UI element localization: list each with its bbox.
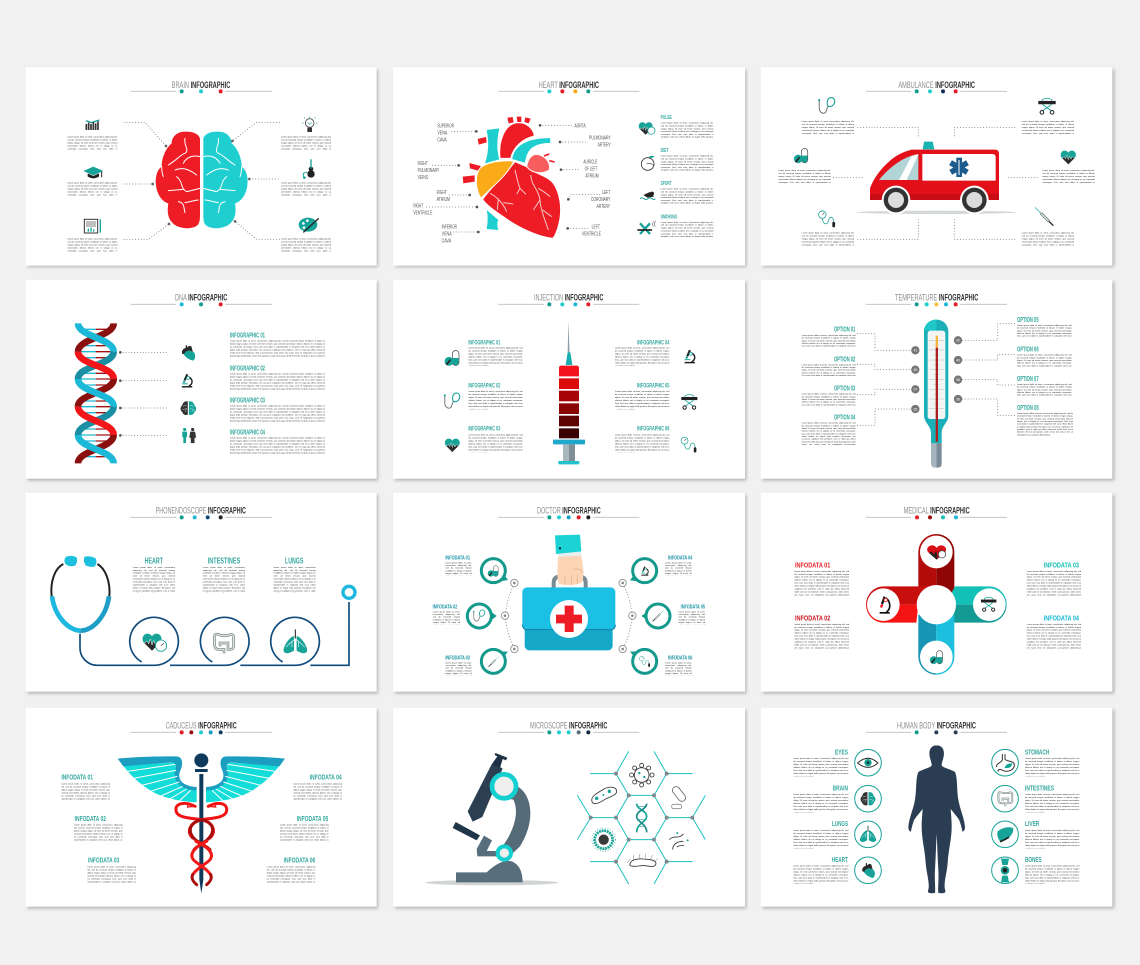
temperature markers: 42: [956, 339, 960, 343]
heart anatomy labels: RIGHT: [413, 203, 424, 209]
icon: stretcher: [981, 597, 996, 611]
syringe illustration: [553, 321, 585, 464]
infographic 01: INFOGRAPHIC 01: [468, 340, 501, 346]
heart anatomy labels: INFERIOR: [442, 224, 457, 230]
heading and text: pulse: PULSE: [661, 115, 672, 121]
heart anatomy labels: SUPERIOR: [437, 124, 454, 130]
option 07: OPTION 07: [1017, 376, 1039, 383]
infodata 04: [665, 555, 693, 576]
icon: apple: [641, 156, 654, 170]
infographic 02: INFOGRAPHIC 02: [230, 366, 265, 373]
infographic 04: INFOGRAPHIC 04: [230, 430, 265, 437]
dotted connectors: [857, 324, 1016, 425]
panel: ambulance infographic: [760, 68, 1116, 268]
infodata 04: INFODATA 04: [668, 555, 693, 561]
brain section: BRAIN: [833, 783, 848, 792]
icon: heart with gauge: [927, 545, 946, 560]
icon: pill: [794, 148, 808, 163]
option 05: [1017, 317, 1072, 338]
heart anatomy labels: PULMONARY: [589, 135, 611, 141]
title: TEMPERATURE INFOGRAPHIC: [895, 293, 979, 303]
panel: doctor infographic: [393, 492, 748, 696]
infodata 05: [678, 604, 705, 625]
infodata 06: INFODATA 06: [668, 655, 692, 661]
icon: stretcher: [681, 394, 697, 409]
infographic 06: INFOGRAPHIC 06: [637, 427, 670, 433]
infodata 03: INFODATA 03: [88, 857, 119, 864]
title: [866, 293, 1007, 306]
heart anatomy labels: CAVA: [437, 138, 447, 144]
icon: lungs: [284, 629, 307, 653]
title: HEART INFOGRAPHIC: [539, 80, 599, 90]
title: [498, 721, 639, 734]
title: HUMAN BODY INFOGRAPHIC: [897, 721, 976, 731]
icon: brain: [181, 401, 196, 415]
dotted connectors: [833, 128, 1038, 239]
heading and text: diet: DIET: [661, 148, 669, 154]
icon: bacterium left: [592, 787, 617, 804]
infographic 02: INFOGRAPHIC 02: [468, 383, 501, 389]
heart anatomy labels: VENTRICLE: [413, 210, 432, 216]
infographic 01: [230, 333, 325, 358]
heart anatomy labels: CAVA: [442, 238, 451, 244]
heart anatomy labels: OF LEFT: [585, 166, 598, 172]
infodata 04: INFODATA 04: [1044, 613, 1080, 622]
infodata 02: INFODATA 02: [795, 613, 830, 622]
infodata 05: [280, 816, 329, 842]
infodata 05: INFODATA 05: [297, 816, 328, 823]
infodata 01: [445, 555, 472, 576]
heart anatomy labels: VENTRICLE: [582, 231, 601, 237]
icon: teal virus: [592, 828, 615, 851]
icon: lungs: [860, 826, 876, 842]
heading and text: smoking: SMOKING: [661, 214, 678, 220]
infographic 04: INFOGRAPHIC 04: [637, 340, 670, 346]
infodata 04: INFODATA 04: [310, 775, 342, 782]
infodata 04: [293, 775, 342, 800]
icon: pill: [445, 350, 459, 366]
heart anatomy labels: VENA: [442, 231, 452, 237]
title: [498, 293, 639, 306]
heading and text: sport: SPORT: [661, 181, 672, 187]
icon: worm: [627, 854, 658, 866]
temperature markers: [911, 336, 962, 413]
icon: syringe: [1035, 207, 1053, 226]
icon: liver: [997, 827, 1013, 842]
icon: heart organ: [862, 863, 875, 878]
panel: phonendoscope infographic: [26, 492, 380, 696]
icon: swimmer: [640, 192, 655, 200]
infodata 03: INFODATA 03: [1044, 560, 1079, 569]
icon: stethoscope: [444, 393, 460, 408]
panel: caduceus infographic: [26, 708, 380, 910]
stomach section: STOMACH: [1025, 748, 1049, 757]
heart anatomy labels: RIGHT: [437, 190, 447, 196]
icon: microscope: [685, 350, 695, 363]
infodata 02: [433, 604, 460, 625]
heading and text: pulse: [661, 115, 713, 138]
bubbles with icons: [467, 559, 670, 673]
infodata 06: INFODATA 06: [284, 857, 315, 864]
panel: dna infographic: [26, 280, 380, 482]
infodata 02: INFODATA 02: [75, 816, 106, 823]
intestines section: [1025, 783, 1079, 812]
icon: blood pressure monitor: [819, 211, 835, 227]
icon: microscope: [182, 374, 192, 388]
icon: virus outline: [630, 763, 654, 787]
heart anatomy labels: VENA: [437, 131, 447, 137]
bones section: BONES: [1025, 855, 1042, 864]
eyes section: [793, 748, 848, 776]
temperature markers: 40: [956, 358, 960, 362]
stethoscope illustration: [51, 556, 355, 665]
intestines section: INTESTINES: [208, 555, 241, 565]
infodata 02: [74, 816, 123, 842]
icon: heart with gauge: [143, 634, 167, 651]
infodata 01: [61, 775, 110, 800]
icon: brain: [861, 792, 875, 805]
heart anatomy labels: AORTA: [574, 124, 586, 130]
stomach section: [1025, 748, 1079, 776]
icon: pill: [930, 651, 943, 664]
icon: light bulb: [302, 117, 317, 132]
option 03: OPTION 03: [834, 386, 855, 393]
hand and cuff illustration: [555, 535, 583, 585]
icon: intestines: [998, 792, 1012, 806]
heading and text: diet: [661, 148, 713, 171]
heart anatomy labels: RIGHT: [418, 161, 428, 167]
intestines section: INTESTINES: [1025, 783, 1054, 792]
microscope illustration: [425, 753, 558, 885]
heart anatomy labels: PULMONARY: [418, 168, 439, 174]
title: [131, 80, 272, 93]
temperature markers: 41: [913, 349, 917, 353]
infographic 03: INFOGRAPHIC 03: [230, 398, 265, 405]
icon: heart organ: [182, 345, 195, 361]
medical cross diagram: [866, 534, 1007, 675]
icon: stethoscope: [818, 98, 835, 113]
panel: medical infographic: [760, 492, 1116, 696]
thermometer illustration: [924, 320, 948, 468]
bones section: [1025, 855, 1079, 884]
icon: blood pressure monitor: [681, 437, 696, 453]
infodata 06: [267, 857, 315, 883]
heart anatomy labels: ARTERY: [597, 204, 610, 210]
infodata 06: [665, 655, 692, 676]
icon: stomach: [997, 754, 1014, 772]
heart anatomy labels: AURICLE: [583, 159, 597, 165]
option 08: Lorem ipsum dolor sit amet, consectetur adipiscing elit, sed do eiusmod tempor incididunt ut labore et dolore magna aliqua. Ut enim ad minim veniam, quis nostrud exercitation ullamco laboris nisi ut aliquip ex ea commodo consequat. Duis aute irure dolor in reprehenderit in voluptate velit esse cillum dolore eu fugiat nulla pariatur. Excepteur sint occaecat cupidatat non proident, sunt in culpa qui officia deserunt mollit anim id est laborum. Sed ut perspiciatis unde omnis iste natus error sit voluptatem accusantium doloremque.: [1017, 412, 1073, 436]
medical case illustration: [522, 577, 615, 650]
title: CADUCEUS INFOGRAPHIC: [166, 721, 237, 731]
icon: eye: [858, 758, 878, 767]
title: MICROSCOPE INFOGRAPHIC: [530, 721, 608, 731]
infographic 05: INFOGRAPHIC 05: [637, 383, 670, 389]
infodata 01: INFODATA 01: [795, 560, 830, 569]
panel: brain infographic: [26, 68, 380, 268]
icon: squiggle germs: [669, 832, 689, 850]
infodata 01: INFODATA 01: [61, 775, 93, 782]
title: [498, 80, 639, 93]
infodata 02: INFODATA 02: [433, 604, 457, 610]
hexagon network: [577, 751, 705, 884]
icon circles: [855, 749, 1018, 884]
panel: injection infographic: [393, 280, 748, 482]
lungs section: LUNGS: [285, 555, 304, 565]
dotted connectors: [119, 351, 167, 437]
heart section: HEART: [832, 855, 848, 864]
icon: intestines: [214, 634, 234, 653]
icon: no smoking: [637, 221, 656, 234]
heart section: [793, 855, 848, 884]
heart anatomy labels: CORONARY: [591, 197, 610, 203]
ambulance illustration: [856, 142, 1016, 214]
infodata 03: [87, 857, 136, 883]
title: [498, 506, 639, 519]
temperature markers: 35: [913, 407, 917, 411]
option 06: OPTION 06: [1017, 347, 1039, 354]
human silhouette: [908, 745, 965, 893]
title: [866, 721, 1007, 734]
lungs section: LUNGS: [832, 819, 848, 828]
infographic 03: INFOGRAPHIC 03: [468, 427, 501, 433]
dotted arcs and nodes: [501, 579, 636, 653]
option 01: [802, 327, 856, 348]
caduceus staff: [194, 753, 208, 894]
brain illustration: [156, 132, 248, 228]
liver section: LIVER: [1025, 819, 1040, 828]
title: AMBULANCE INFOGRAPHIC: [898, 80, 975, 90]
icon: bacterium right: [671, 785, 687, 809]
icon: bones joint: [1001, 859, 1009, 882]
icon: palette: [299, 218, 319, 232]
option 05: OPTION 05: [1017, 317, 1039, 324]
dotted connectors: [124, 122, 279, 239]
heart illustration: [463, 117, 561, 238]
title: [866, 506, 1007, 519]
icon: dna: [637, 804, 647, 832]
panel: human body infographic: [760, 708, 1116, 910]
option 01: OPTION 01: [834, 327, 855, 334]
heart anatomy labels: VEINS: [418, 175, 428, 181]
heading and text: smoking: [661, 214, 713, 237]
icon: mortarboard: [83, 167, 103, 178]
title: [131, 506, 272, 519]
infodata 03: INFODATA 03: [445, 655, 470, 661]
heart anatomy labels: ATRIUM: [437, 197, 450, 203]
eyes section: EYES: [835, 748, 848, 757]
option 08: OPTION 08: [1017, 405, 1039, 412]
heart anatomy labels: LEFT: [592, 224, 600, 230]
brain section: [793, 783, 848, 812]
icon: guitar: [303, 159, 315, 179]
icon: stretcher: [1038, 98, 1056, 114]
title: [866, 80, 1007, 93]
panel: temperature infographic: [760, 280, 1116, 482]
heart anatomy labels: ATRIUM: [585, 174, 599, 180]
temperature markers: 38: [956, 378, 960, 382]
caduceus snakes: [176, 803, 227, 885]
title: BRAIN INFOGRAPHIC: [172, 80, 231, 90]
dna helix: [78, 323, 114, 463]
option 04: OPTION 04: [834, 415, 855, 422]
infodata 03: [445, 655, 472, 676]
infodata 01: INFODATA 01: [445, 555, 470, 561]
caduceus wings: [118, 756, 285, 802]
temperature markers: 37: [913, 388, 917, 392]
panel: microscope infographic: [393, 708, 748, 910]
temperature markers: 36: [956, 397, 960, 401]
dotted connectors: [427, 124, 600, 233]
icon: pulse: [639, 122, 655, 135]
icon: heart pulse: [1061, 151, 1076, 165]
option 02: [802, 356, 856, 377]
icon: people: [182, 428, 196, 443]
title: MEDICAL INFOGRAPHIC: [904, 506, 970, 516]
option 07: [1017, 376, 1072, 397]
heart anatomy labels: [413, 124, 611, 244]
panel: heart infographic: [393, 68, 748, 268]
icon: microscope: [880, 596, 890, 614]
option 03: [802, 386, 856, 406]
option 06: [1017, 347, 1072, 367]
icon: notepad: [84, 219, 100, 233]
title: [131, 293, 272, 306]
heart section: HEART: [145, 555, 163, 565]
heart anatomy labels: LEFT: [602, 190, 611, 196]
lungs section: [793, 819, 848, 848]
option 02: OPTION 02: [834, 356, 855, 363]
title: DOCTOR INFOGRAPHIC: [537, 506, 601, 516]
heading and text: sport: [661, 181, 713, 204]
heart anatomy labels: ARTERY: [598, 142, 611, 148]
title: [131, 721, 272, 734]
temperature markers: 39: [913, 368, 917, 372]
icon: chart: [86, 120, 99, 130]
infodata 05: INFODATA 05: [681, 604, 705, 610]
liver section: [1025, 819, 1079, 848]
icon: heart pulse: [445, 439, 460, 452]
title: INJECTION INFOGRAPHIC: [534, 293, 604, 303]
title: PHONENDOSCOPE INFOGRAPHIC: [156, 506, 246, 516]
title: DNA INFOGRAPHIC: [175, 293, 228, 303]
infographic 01: INFOGRAPHIC 01: [230, 333, 265, 340]
